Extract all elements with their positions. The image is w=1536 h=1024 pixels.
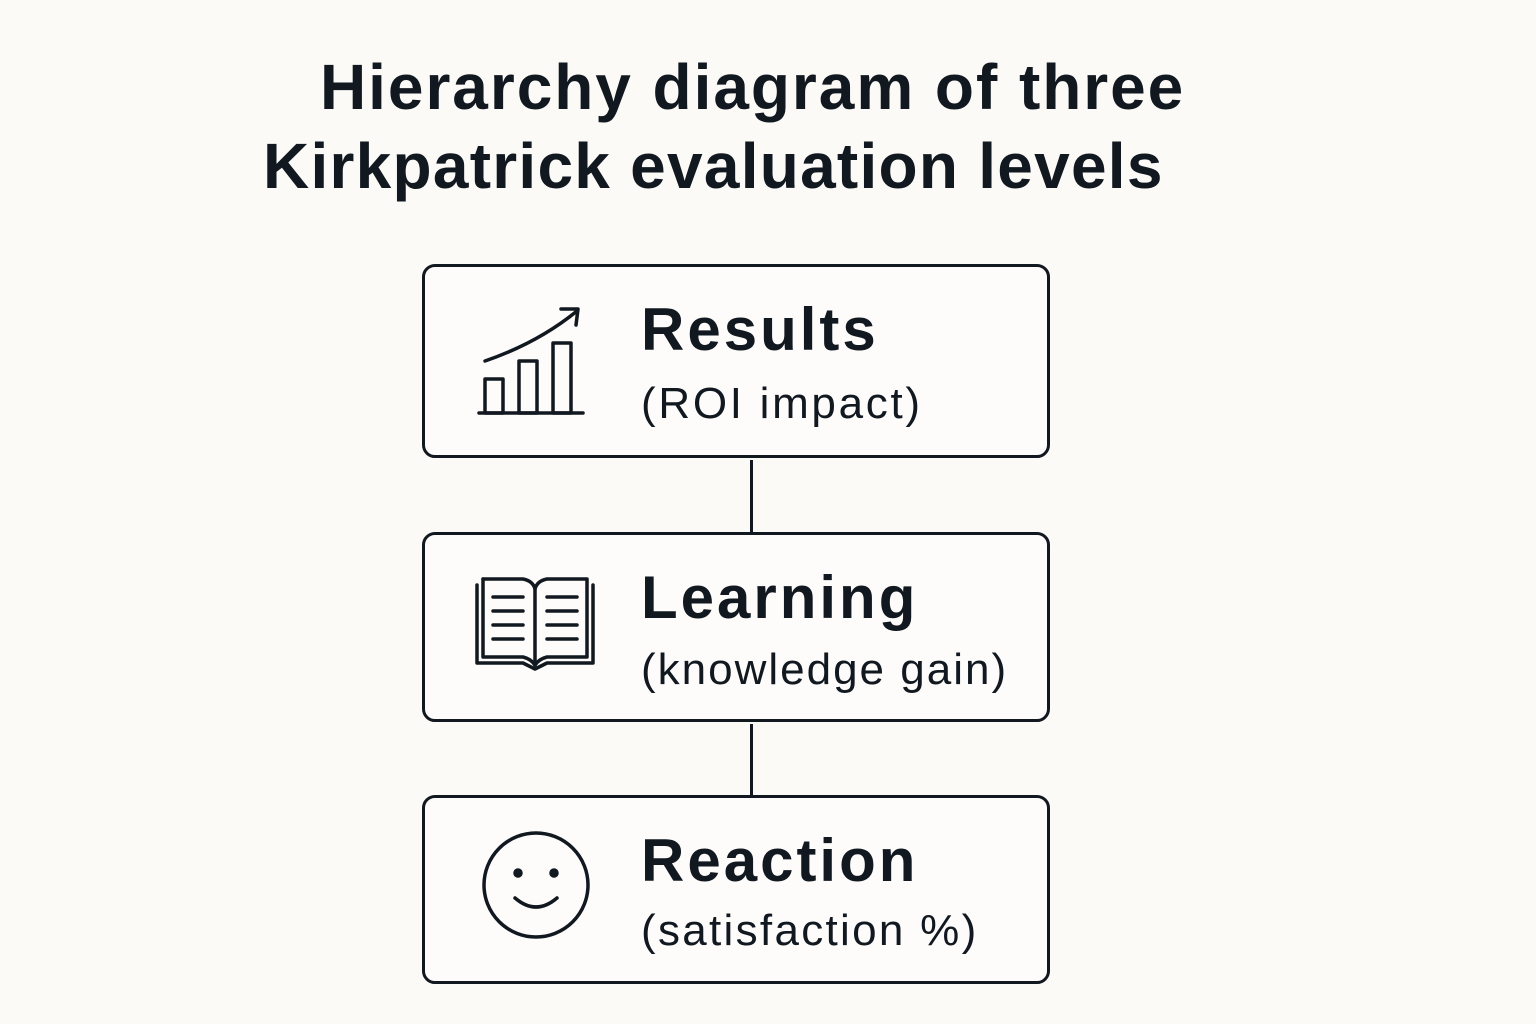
text: Hierarchy diagram of three	[320, 51, 1185, 123]
panel: learning	[422, 532, 1050, 722]
panel: results	[422, 264, 1050, 458]
heading: results: Results	[641, 296, 879, 363]
icon: smiley	[482, 831, 590, 939]
panel: reaction	[422, 795, 1050, 984]
icon: open book	[475, 577, 595, 671]
title	[263, 51, 1185, 202]
connector: learning to reaction	[750, 724, 753, 796]
heading: reaction: Reaction	[641, 827, 918, 894]
text: satisfaction: (satisfaction %)	[641, 906, 979, 955]
text: Kirkpatrick evaluation levels	[263, 130, 1164, 202]
text: knowledge gain: (knowledge gain)	[641, 645, 1008, 694]
heading: learning: Learning	[641, 564, 918, 631]
connector: results to learning	[750, 460, 753, 532]
text: ROI impact: (ROI impact)	[641, 379, 923, 428]
icon: bar chart	[477, 307, 585, 415]
